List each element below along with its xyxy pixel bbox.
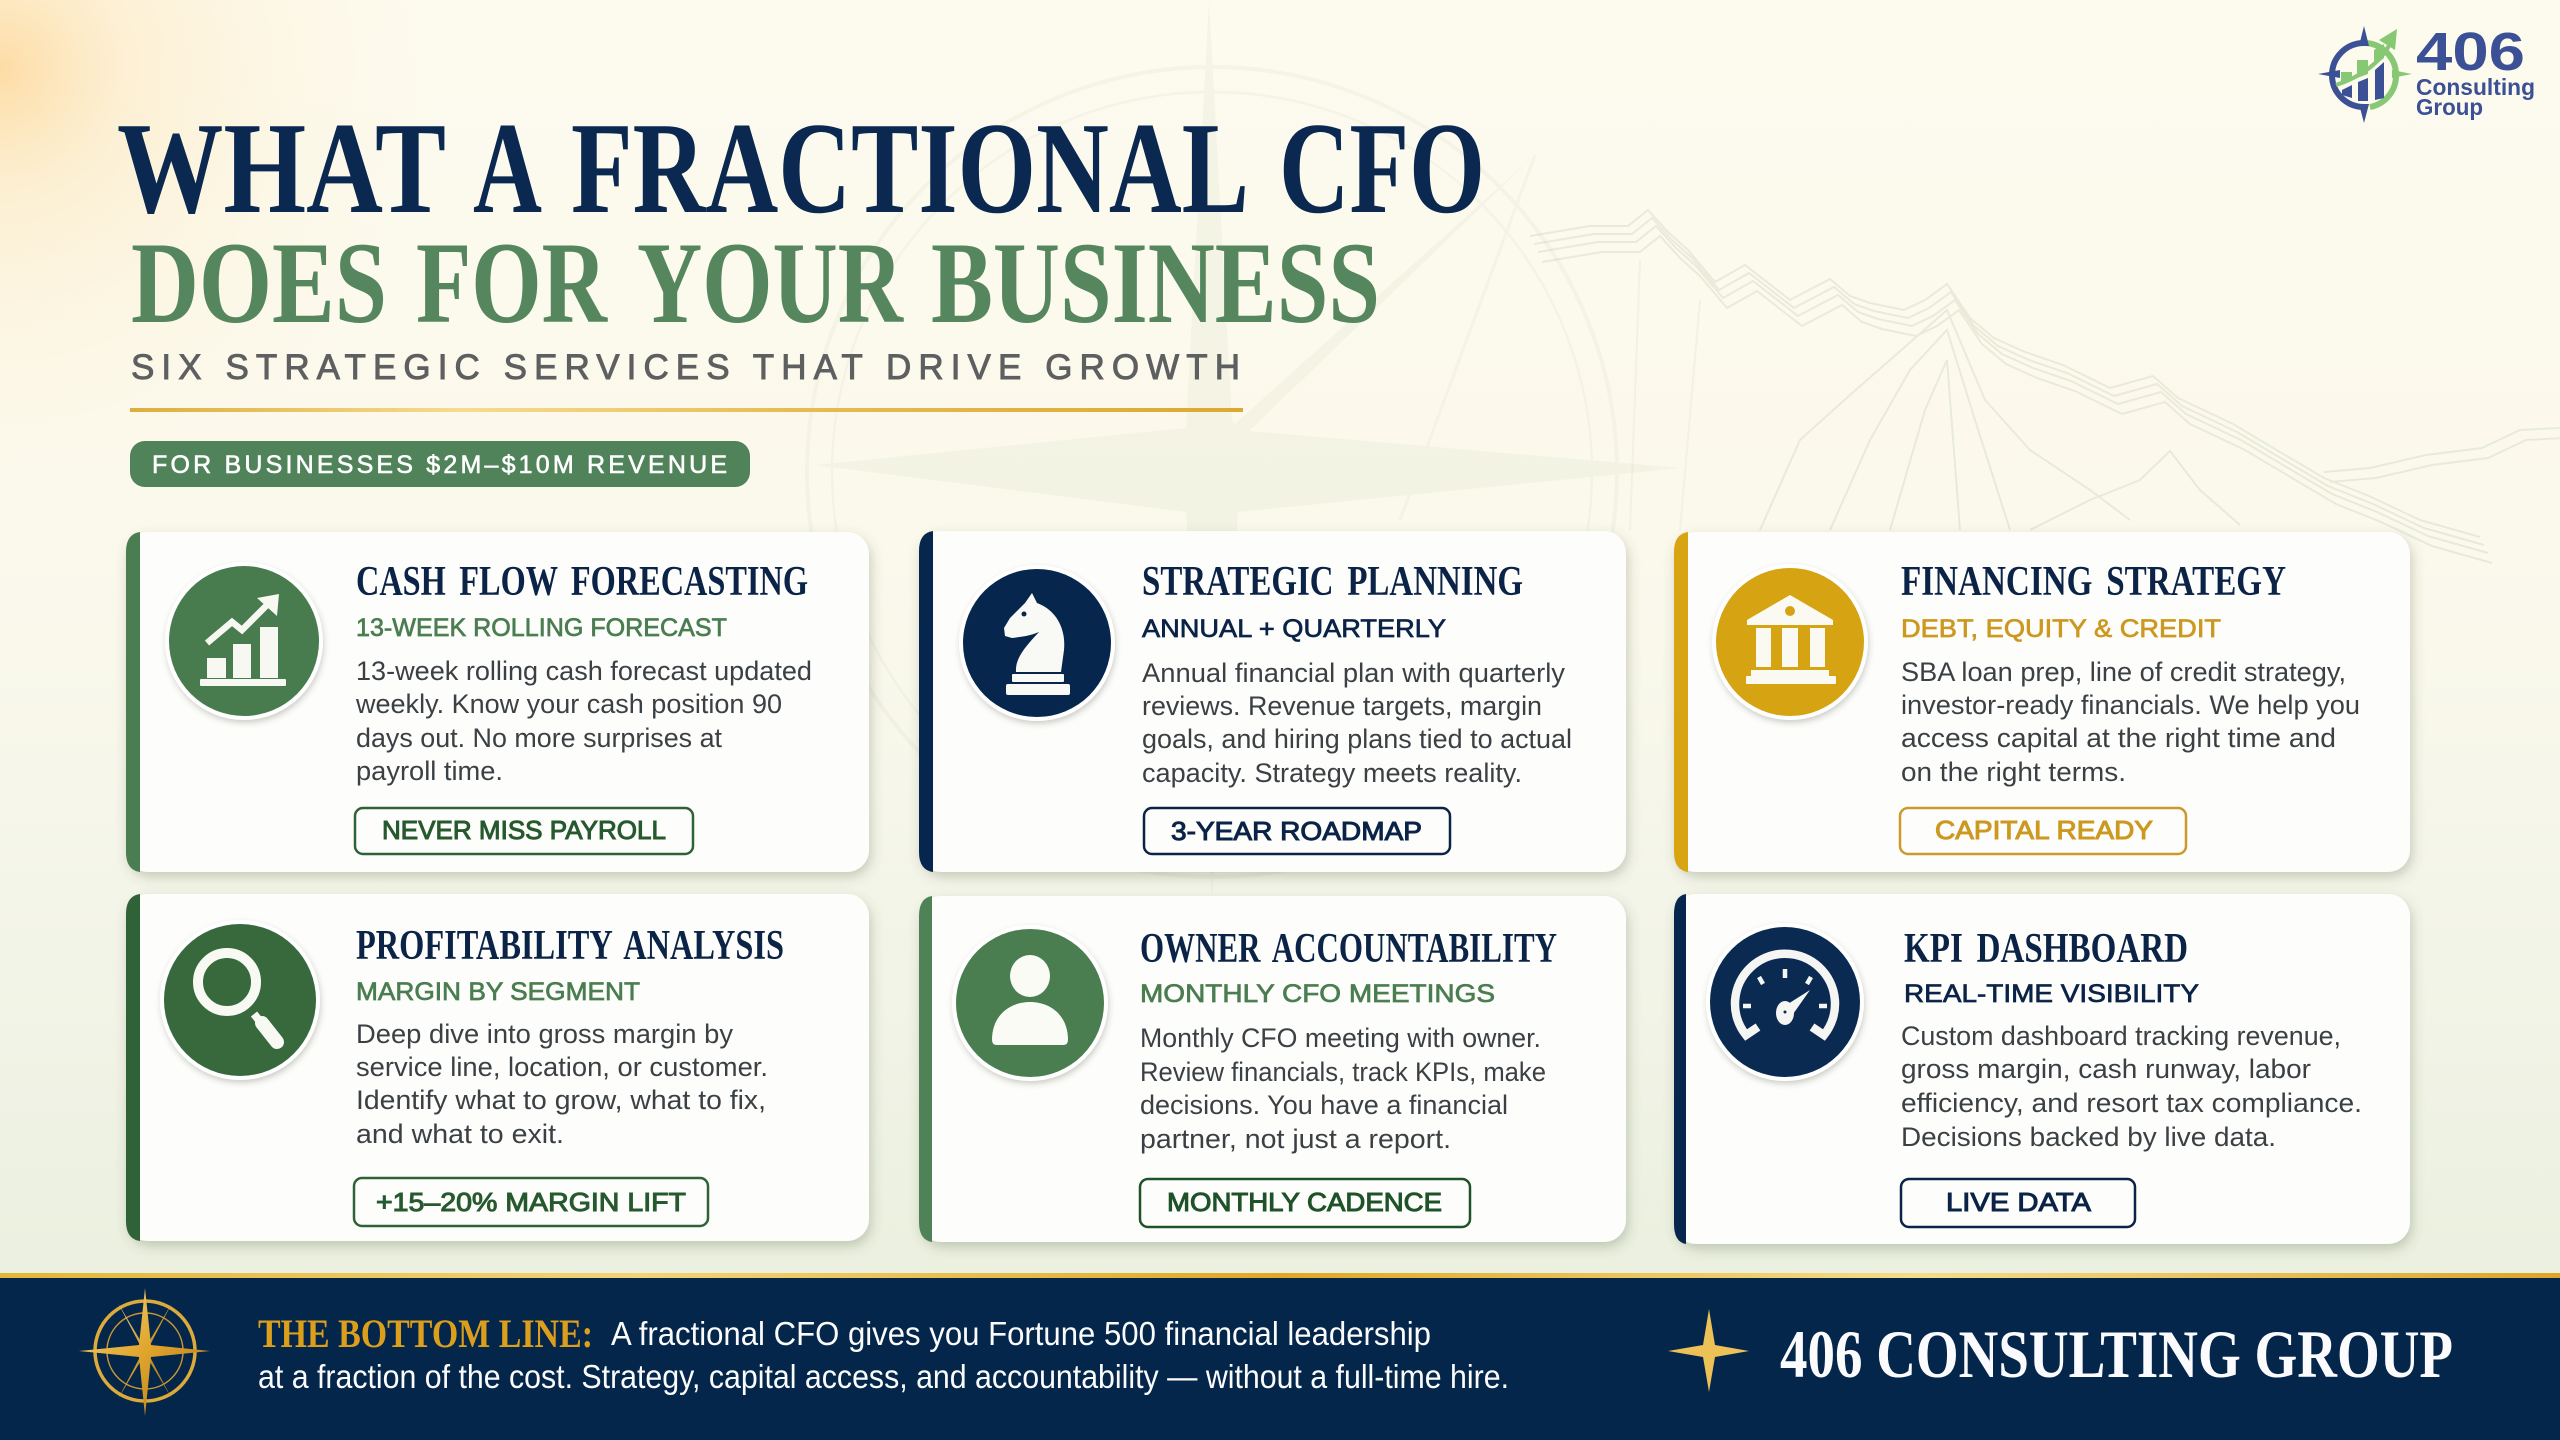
- card subtitle: REAL-TIME VISIBILITY: [1904, 980, 2199, 1008]
- card subtitle: MARGIN BY SEGMENT: [356, 978, 640, 1006]
- tag: capital ready: CAPITAL READY: [1935, 817, 2153, 845]
- card subtitle: 13-WEEK ROLLING FORECAST: [356, 614, 727, 642]
- card description: Annual financial plan with quarterly: [1142, 658, 1566, 688]
- gold divider: [130, 408, 1243, 412]
- icon: growth chart: [165, 562, 323, 720]
- logo wordmark: [2416, 22, 2535, 120]
- card description: and what to exit.: [356, 1119, 564, 1149]
- icon: person: [952, 925, 1108, 1081]
- card subtitle: ANNUAL + QUARTERLY: [1142, 615, 1446, 643]
- bottom line message: [258, 1315, 1509, 1395]
- card description: Identify what to grow, what to fix,: [356, 1085, 766, 1115]
- footer band: [0, 1273, 2560, 1440]
- card description: investor-ready financials. We help you: [1901, 690, 2360, 720]
- panel: owner accountability: [919, 896, 1626, 1242]
- card description: [1901, 657, 2360, 787]
- title: line two: BUSINESS: [931, 219, 1380, 348]
- card description: Decisions backed by live data.: [1901, 1122, 2276, 1152]
- icon: gold star: [1668, 1309, 1749, 1392]
- card description: weekly. Know your cash position 90: [355, 689, 782, 719]
- icon: gold compass rose: [79, 1288, 210, 1416]
- tag: 3-year roadmap: 3-YEAR ROADMAP: [1171, 818, 1422, 846]
- card description: days out. No more surprises at: [356, 723, 722, 753]
- card description: [1140, 1023, 1546, 1154]
- card description: Deep dive into gross margin by: [356, 1019, 734, 1049]
- icon: gauge: [1706, 923, 1864, 1081]
- title: line two: YOUR: [637, 219, 904, 348]
- card description: [1901, 1021, 2362, 1152]
- bottom line message: at a fraction of the cost. Strategy, capital access, and accountability — without a full-time hire.: [258, 1358, 1509, 1395]
- card description: Monthly CFO meeting with owner.: [1140, 1023, 1541, 1053]
- card title: STRATEGIC PLANNING: [1142, 559, 1523, 605]
- card description: Custom dashboard tracking revenue,: [1901, 1021, 2341, 1051]
- card description: capacity. Strategy meets reality.: [1142, 758, 1522, 788]
- title: line one: [117, 96, 1485, 241]
- title: line two: FOR: [416, 219, 608, 348]
- card title: CASH FLOW FORECASTING: [356, 559, 808, 605]
- card title: OWNER ACCOUNTABILITY: [1140, 926, 1557, 972]
- logo icon: compass with bars and arrow: [2318, 26, 2412, 123]
- card description: access capital at the right time and: [1901, 723, 2336, 753]
- card description: service line, location, or customer.: [356, 1052, 768, 1082]
- watermark: compass rose: [807, 2, 1682, 900]
- tag: monthly cadence: [1140, 1179, 1470, 1227]
- panel: kpi dashboard: [1674, 894, 2410, 1244]
- logo: 406 Consulting Group: [2318, 22, 2535, 123]
- tag: never miss payroll: NEVER MISS PAYROLL: [382, 817, 666, 845]
- tag: live data: [1901, 1179, 2135, 1227]
- card title: PROFITABILITY ANALYSIS: [356, 923, 784, 969]
- card description: reviews. Revenue targets, margin: [1142, 691, 1542, 721]
- card title: FINANCING STRATEGY: [1901, 559, 2286, 605]
- tag: 3-year roadmap: [1144, 808, 1450, 854]
- card description: [1142, 658, 1572, 788]
- bottom line message: A fractional CFO gives you Fortune 500 financial leadership: [611, 1315, 1431, 1352]
- card description: Review financials, track KPIs, make: [1140, 1057, 1546, 1087]
- badge: revenue range: [130, 441, 750, 487]
- title: line one: A: [473, 96, 542, 241]
- card title: KPI DASHBOARD: [1904, 926, 2188, 972]
- card description: SBA loan prep, line of credit strategy,: [1901, 657, 2346, 687]
- badge: revenue range: FOR BUSINESSES $2M–$10M REVENUE: [152, 451, 727, 479]
- icon: magnifying glass: [160, 920, 320, 1080]
- logo wordmark: 406: [2416, 22, 2525, 82]
- panel: profitability analysis: [126, 894, 869, 1241]
- title: line two: [131, 219, 1380, 348]
- tag: never miss payroll: [355, 808, 693, 854]
- panel: cash flow forecasting: [126, 532, 869, 872]
- title: line one: CFO: [1279, 96, 1485, 241]
- card description: gross margin, cash runway, labor: [1901, 1054, 2311, 1084]
- tag: margin lift: [354, 1178, 708, 1226]
- card description: goals, and hiring plans tied to actual: [1142, 724, 1572, 754]
- card description: payroll time.: [356, 756, 503, 786]
- card description: partner, not just a report.: [1140, 1124, 1451, 1154]
- card subtitle: MONTHLY CFO MEETINGS: [1140, 980, 1495, 1008]
- title: line one: WHAT: [117, 96, 446, 241]
- panel: financing strategy: [1674, 532, 2410, 872]
- card description: efficiency, and resort tax compliance.: [1901, 1088, 2362, 1118]
- subtitle: SIX STRATEGIC SERVICES THAT DRIVE GROWTH: [131, 348, 1240, 387]
- icon: bank building: [1712, 564, 1868, 720]
- title: line one: FRACTIONAL: [571, 96, 1249, 241]
- title: line two: DOES: [131, 219, 387, 348]
- tag: live data: LIVE DATA: [1946, 1189, 2091, 1217]
- panel: strategic planning: [919, 531, 1626, 872]
- tag: margin lift: +15–20% MARGIN LIFT: [376, 1189, 686, 1217]
- bottom line label: THE BOTTOM LINE:: [258, 1311, 593, 1356]
- card description: decisions. You have a financial: [1140, 1090, 1508, 1120]
- watermark: mountain contours: [1530, 210, 2560, 563]
- tag: monthly cadence: MONTHLY CADENCE: [1167, 1189, 1442, 1217]
- icon: chess knight: [959, 565, 1115, 721]
- card description: [355, 656, 812, 786]
- card subtitle: DEBT, EQUITY & CREDIT: [1901, 615, 2221, 643]
- card description: [356, 1019, 768, 1149]
- tag: capital ready: [1900, 808, 2186, 854]
- card description: 13-week rolling cash forecast updated: [356, 656, 812, 686]
- logo wordmark: Consulting: [2416, 74, 2535, 100]
- logo wordmark: Group: [2416, 94, 2483, 120]
- card description: on the right terms.: [1901, 757, 2126, 787]
